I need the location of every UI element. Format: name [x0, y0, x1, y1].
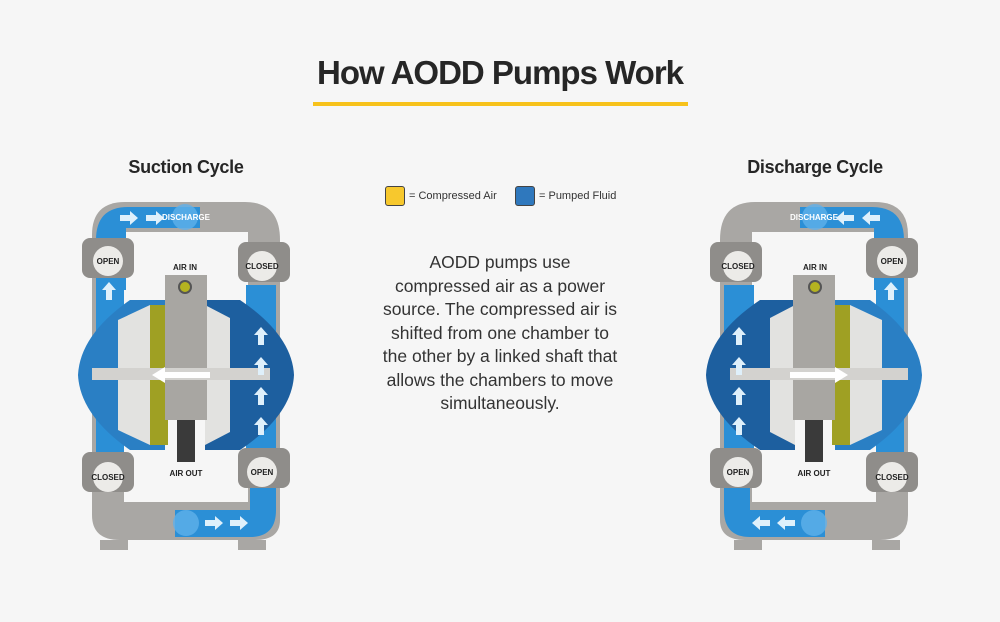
title underline [313, 102, 688, 106]
pump: discharge cycle: CLOSED [875, 473, 909, 482]
pump: discharge cycle: CLOSED [721, 262, 755, 271]
pump: suction cycle [78, 202, 294, 550]
heading: suction cycle: Suction Cycle [128, 157, 244, 177]
pump: discharge cycle: OPEN [881, 257, 904, 266]
description text: AODD pumps use compressed air as a power source. The compressed air is shifted from one chamber to the other by a linked shaft that allows the chambers to move simultaneously. [383, 252, 617, 413]
pump: suction cycle: CLOSED [245, 262, 279, 271]
pump: suction cycle: DISCHARGE [162, 213, 211, 222]
pump: discharge cycle: AIR IN [803, 263, 827, 272]
pump: discharge cycle [706, 202, 922, 550]
title: How AODD Pumps Work [317, 54, 683, 91]
legend: = Pumped Fluid [539, 190, 616, 202]
pump: suction cycle: CLOSED [91, 473, 125, 482]
pump: discharge cycle: DISCHARGE [790, 213, 839, 222]
pump: discharge cycle: OPEN [727, 468, 750, 477]
pump: suction cycle: AIR OUT [170, 469, 203, 478]
pump: suction cycle: OPEN [97, 257, 120, 266]
heading: discharge cycle: Discharge Cycle [747, 157, 883, 177]
pump: discharge cycle: AIR OUT [798, 469, 831, 478]
pump: suction cycle: OPEN [251, 468, 274, 477]
pump: suction cycle: AIR IN [173, 263, 197, 272]
legend [385, 186, 616, 206]
legend: = Compressed Air [409, 190, 497, 202]
